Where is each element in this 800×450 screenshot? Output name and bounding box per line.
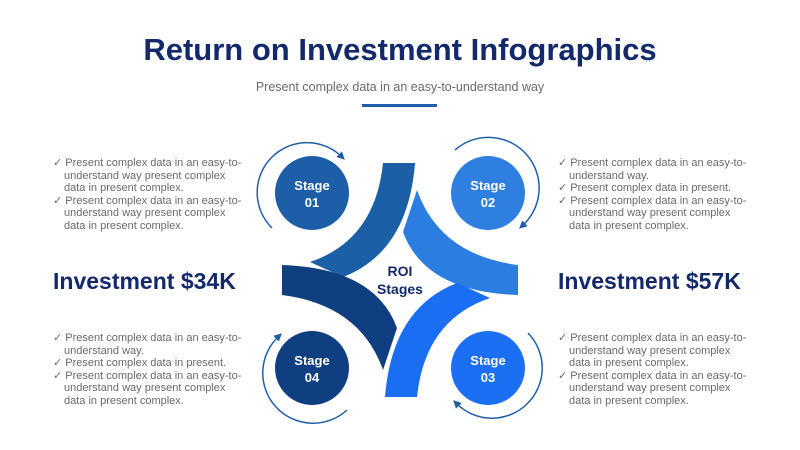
subtitle: Present complex data in an easy-to-understand way <box>256 80 544 94</box>
text block: bottom left <box>53 332 241 406</box>
text block: top right: data in present complex. <box>569 220 689 232</box>
band 3 <box>385 283 490 397</box>
stage 02 <box>451 137 539 230</box>
stage 04: Stage <box>294 353 330 368</box>
text block: top right: ✓ Present complex data in an easy-to- <box>558 194 746 206</box>
text block: top right: ✓ Present complex data in present. <box>558 182 731 194</box>
band 4 <box>282 265 397 370</box>
stage 04: 04 <box>305 370 320 385</box>
text block: top left: understand way present complex <box>64 207 225 219</box>
stage 02: 02 <box>481 195 495 210</box>
text block: bottom left: ✓ Present complex data in an easy-to- <box>53 370 241 382</box>
text block: bottom left: ✓ Present complex data in present. <box>53 357 226 369</box>
text block: bottom left: ✓ Present complex data in an easy-to- <box>53 332 241 344</box>
heading: investment right: Investment $57K <box>558 268 741 294</box>
stage 03 <box>451 331 542 418</box>
center label: Stages <box>377 281 423 297</box>
stage 01: 01 <box>305 195 319 210</box>
text block: top left: ✓ Present complex data in an easy-to- <box>53 194 241 206</box>
text block: top right <box>558 157 746 232</box>
stage 01 <box>257 143 349 230</box>
heading: investment left: Investment $34K <box>53 268 236 294</box>
text block: bottom right: ✓ Present complex data in an easy-to- <box>558 332 746 344</box>
text block: bottom right: understand way present complex <box>569 344 730 356</box>
text block: bottom right <box>558 332 746 406</box>
stage 02: Stage <box>470 178 506 193</box>
text block: top left: understand way present complex <box>64 170 225 182</box>
title: Return on Investment Infographics <box>143 32 657 67</box>
text block: bottom left: data in present complex. <box>64 394 184 406</box>
stage 03: Stage <box>470 353 506 368</box>
stage 01: Stage <box>294 178 330 193</box>
text block: top left <box>53 157 241 232</box>
stage 04 <box>263 331 349 423</box>
text block: top left: data in present complex. <box>64 220 184 232</box>
underline accent <box>362 104 437 107</box>
text block: top right: ✓ Present complex data in an easy-to- <box>558 157 746 169</box>
text block: top right: understand way present complex <box>569 207 730 219</box>
text block: bottom right: data in present complex. <box>569 357 689 369</box>
text block: bottom left: understand way. <box>64 344 144 356</box>
band 1 <box>310 163 415 277</box>
text block: bottom right: ✓ Present complex data in an easy-to- <box>558 370 746 382</box>
stage 03: 03 <box>481 370 495 385</box>
text block: bottom left: understand way present complex <box>64 382 225 394</box>
center label <box>377 263 423 297</box>
band 2 <box>403 190 518 295</box>
text block: top left: ✓ Present complex data in an easy-to- <box>53 157 241 169</box>
center label: ROI <box>388 263 412 279</box>
text block: bottom right: understand way present complex <box>569 382 730 394</box>
text block: top left: data in present complex. <box>64 182 184 194</box>
text block: top right: understand way. <box>569 170 649 182</box>
text block: bottom right: data in present complex. <box>569 394 689 406</box>
